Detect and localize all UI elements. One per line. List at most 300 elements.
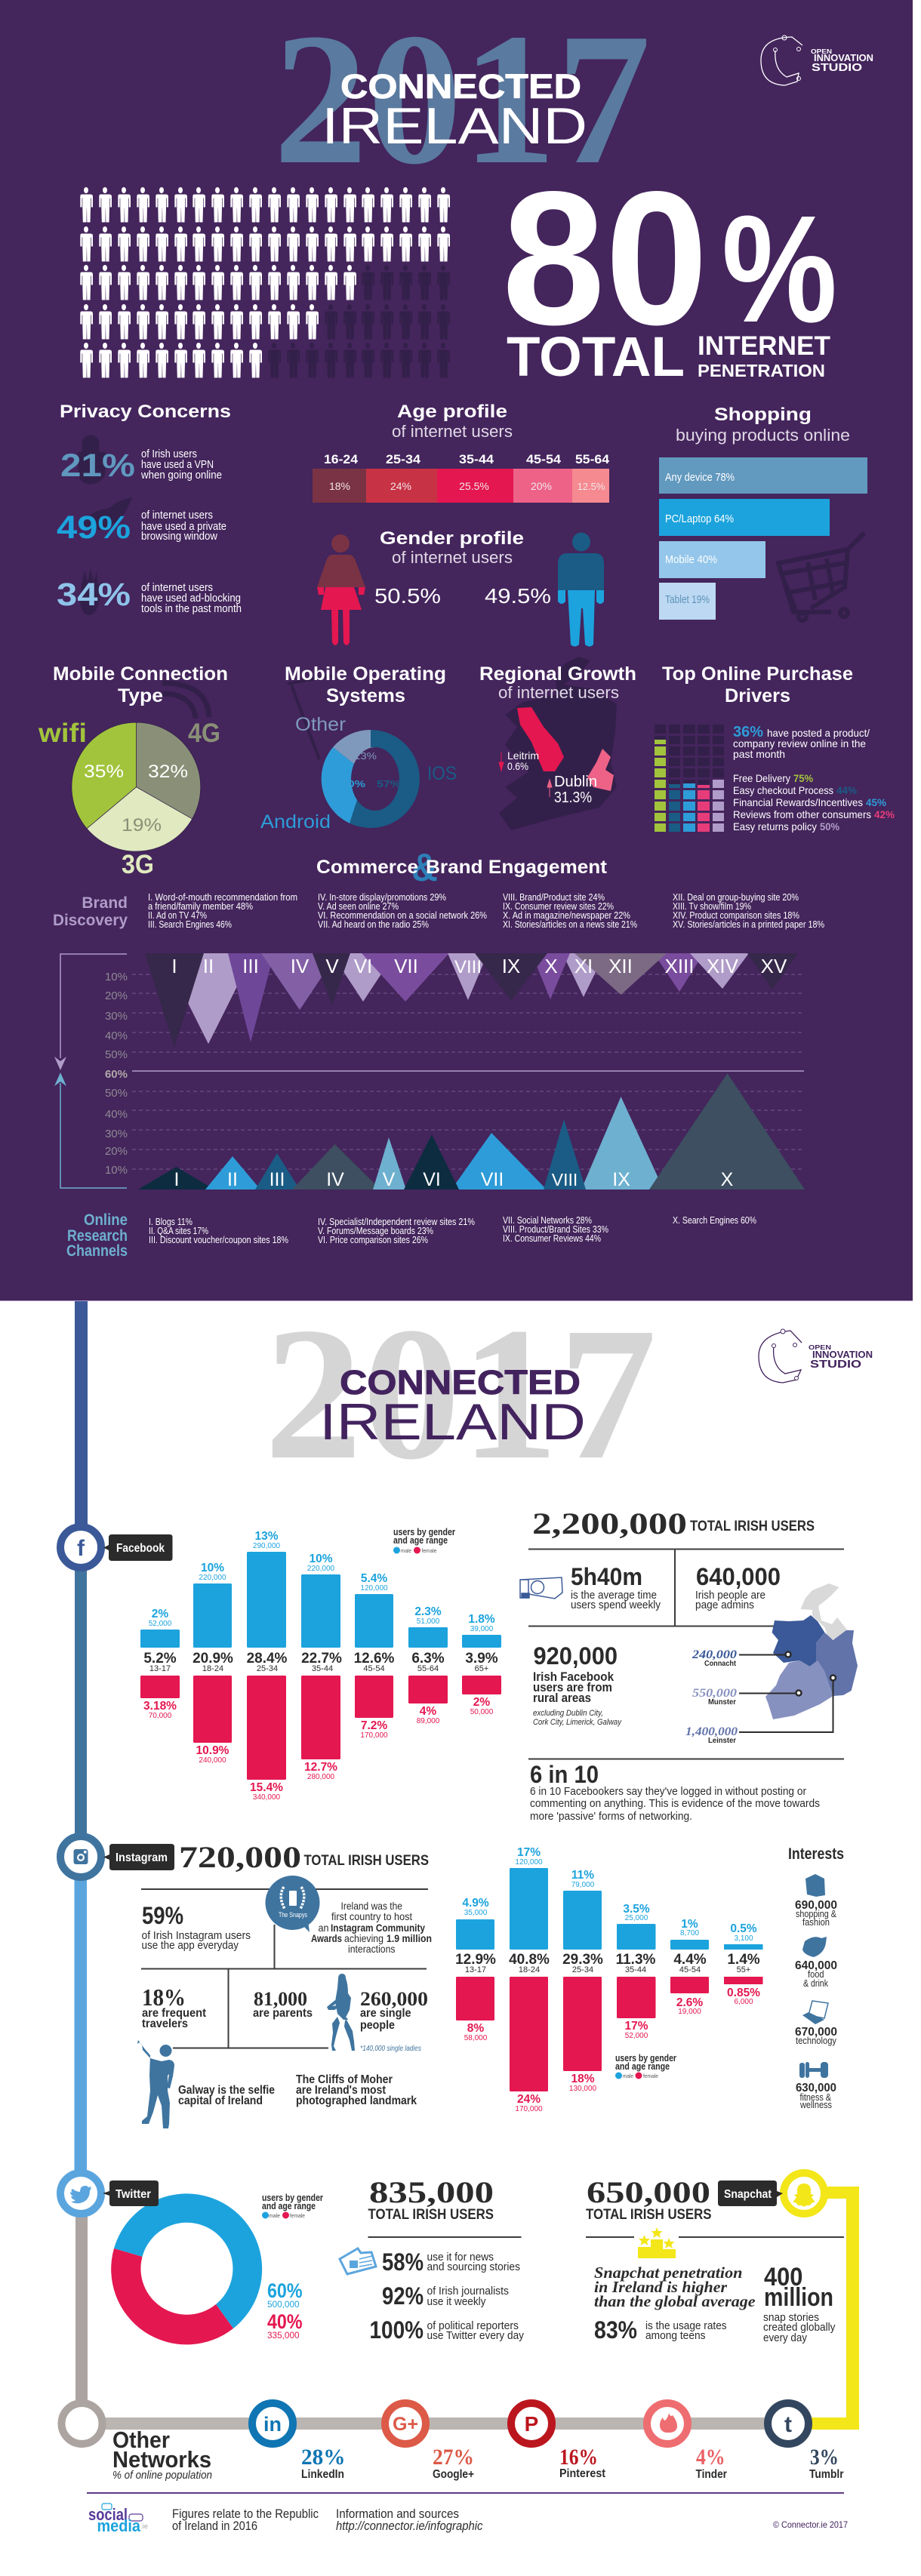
stat: 6 in 10 passive networking	[530, 1761, 820, 1823]
icon: shopping bag	[805, 1874, 825, 1897]
chart: brand discovery and research channels triangles: V	[325, 955, 339, 977]
panel: mobile connection type: wifi	[38, 719, 87, 748]
chart: brand discovery and research channels triangles: V	[383, 1169, 396, 1190]
panel: Facebook	[60, 1507, 858, 1823]
bar chart: Facebook users by gender and age: 220,000	[199, 1574, 226, 1582]
stats: Twitter news use	[370, 2248, 524, 2344]
chart: brand discovery and research channels triangles: IX	[612, 1169, 630, 1190]
bar chart: Instagram users by gender and age: 0.85%	[727, 1987, 760, 1999]
stat: page admins: page admins	[695, 1599, 754, 1611]
legend: Instagram gender: female	[643, 2073, 658, 2079]
icon: The Snapys award bubble	[266, 1876, 320, 1932]
chart: brand discovery and research channels triangles: 10%	[105, 1164, 128, 1177]
bar chart: Facebook users by gender and age: 6.3%	[411, 1651, 445, 1667]
text: Cliffs of Moher	[296, 2073, 417, 2107]
title: 2017 Connected Ireland: IRELAND	[322, 97, 587, 155]
bar chart: Instagram users by gender and age: 79,000	[571, 1881, 595, 1889]
panel: age profile: 35-44	[459, 452, 494, 466]
panel: regional growth	[479, 657, 636, 830]
panel: Instagram interests: 690,000	[795, 1899, 837, 1912]
stat: rural users: excluding Dublin City,	[533, 1709, 603, 1718]
bar chart: Instagram users by gender and age: 55+	[737, 1965, 750, 1974]
bar chart: Facebook users by gender and age: 22.7%	[301, 1651, 342, 1667]
legend: brand discovery list: XII. Deal on group-buying site 20%	[673, 891, 799, 903]
bar chart: Facebook users by gender and age: 25-34	[257, 1664, 278, 1673]
panel: age profile: 24%	[390, 480, 411, 492]
stat: single people: are single	[360, 2007, 411, 2020]
logo: Open Innovation Studio: OPEN	[811, 48, 832, 55]
stat: Twitter gender split: 40%	[267, 2310, 302, 2333]
callouts: province users: Connacht	[704, 1660, 737, 1668]
stat: single people: 260,000	[360, 1988, 428, 2010]
chart: brand discovery and research channels triangles: 10%	[105, 971, 128, 983]
label: Facebook	[103, 1534, 172, 1561]
panel: Instagram interests: Interests	[788, 1845, 844, 1863]
logo: Open Innovation Studio dark: STUDIO	[810, 1358, 861, 1371]
chart: brand discovery and research channels triangles: VII	[394, 955, 418, 977]
bar chart: Facebook users by gender and age: 2%	[152, 1608, 168, 1620]
heading: other networks: Networks	[112, 2446, 211, 2473]
bar chart: Facebook users by gender and age: 290,000	[253, 1542, 281, 1550]
legend: Twitter gender	[262, 2192, 323, 2219]
bar chart: Facebook users by gender and age: 51,000	[417, 1617, 440, 1626]
bar chart: Instagram users by gender and age: 45-54	[679, 1965, 701, 1974]
title: white section 2017 Connected Ireland: IRELAND	[319, 1393, 586, 1451]
timeline: network connector line	[74, 1301, 859, 2430]
label: Snapchat	[718, 2181, 783, 2206]
stat: daily use: use the app everyday	[142, 1939, 239, 1952]
stat: Tinder: Tinder	[696, 2468, 727, 2481]
label: Twitter	[103, 2181, 159, 2206]
panel: regional growth: Dublin	[554, 774, 597, 790]
headline stat: 80% total internet penetration	[502, 152, 837, 388]
bar chart: Instagram users by gender and age: 11.3%	[616, 1952, 656, 1968]
logo: Open Innovation Studio dark: OPEN	[809, 1343, 831, 1351]
panel: gender profile: 50.5%	[374, 584, 441, 608]
logo: socialmedia.ie: .ie	[140, 2522, 148, 2530]
stats: Twitter news use: and sourcing stories	[427, 2261, 520, 2273]
legend: Facebook gender	[393, 1526, 455, 1554]
bar chart: Instagram users by gender and age: 19,000	[678, 2008, 701, 2016]
text: copyright: © Connector.ie 2017	[773, 2519, 848, 2530]
panel: privacy concerns: have used a VPN	[141, 458, 214, 471]
chart: brand discovery and research channels triangles: XIV	[707, 955, 739, 977]
text: information and sources: http://connector.ie/infographic	[336, 2519, 483, 2533]
donut chart: operating systems: 30%	[341, 778, 366, 789]
chart: brand discovery and research channels triangles: IV	[326, 1169, 344, 1190]
stats: Twitter news use: of Irish journalists	[427, 2285, 509, 2297]
legend: brand discovery list: VII. Ad heard on the radio 25%	[318, 919, 429, 930]
icon: Instagram	[60, 1836, 101, 1877]
logo: Open Innovation Studio dark	[759, 1329, 873, 1383]
panel: privacy concerns: of internet users	[141, 581, 213, 594]
chart: brand discovery and research channels triangles: 50%	[105, 1048, 128, 1061]
legend: Instagram gender: male	[623, 2073, 633, 2079]
stat: LinkedIn: in	[263, 2413, 282, 2436]
title: white section 2017 Connected Ireland: CONNECTED	[340, 1363, 581, 1402]
legend: Twitter gender: female	[290, 2212, 305, 2219]
arrow: axis up	[60, 1083, 127, 1188]
panel: top online purchase drivers: 36%	[733, 724, 763, 740]
title: 2017 Connected Ireland: 2017	[273, 0, 651, 204]
stat: single people	[360, 1988, 428, 2053]
legend: brand discovery list: XV. Stories/articles in a printed paper 18%	[673, 919, 824, 930]
callouts: province users	[685, 1648, 836, 1745]
chart: brand discovery and research channels triangles: X	[721, 1169, 734, 1190]
panel: mobile operating systems: Android	[260, 811, 331, 833]
stat: frequent travelers	[142, 1984, 207, 2030]
bar chart: Facebook users by gender and age: 50,000	[470, 1708, 494, 1716]
chart: brand discovery and research channels triangles: I	[174, 1169, 179, 1190]
text: selfie capital	[178, 2084, 275, 2107]
stat: Instagram total users	[179, 1840, 429, 1874]
panel: privacy concerns: 34%	[57, 577, 131, 613]
stats: Twitter news use: use it for news	[427, 2251, 494, 2264]
stat: average time spent: 5h40m	[571, 1563, 642, 1590]
panel: Instagram interests: 630,000	[796, 2082, 836, 2094]
panel: purple internet overview	[0, 0, 913, 1301]
text: Instagram Community Awards: Awards	[311, 1932, 342, 1944]
panel: Instagram interests: 640,000	[795, 1959, 837, 1972]
bar chart: Facebook users by gender and age: 120,000	[360, 1584, 388, 1593]
panel: shopping: buying products online	[676, 426, 850, 445]
stat: teen usage: is the usage rates	[645, 2319, 727, 2332]
logo: socialmedia.ie	[88, 2504, 148, 2535]
text: Instagram Community Awards	[311, 1900, 432, 1955]
chart: brand discovery and research channels triangles: 50%	[105, 1087, 128, 1100]
stat: page admins: Irish people are	[695, 1589, 765, 1602]
chart: brand discovery and research channels triangles: 40%	[105, 1029, 128, 1042]
panel: Instagram interests: & drink	[803, 1978, 829, 1989]
text: Snapchat penetration: than the global average	[594, 2292, 755, 2310]
stat: LinkedIn: 28%	[301, 2445, 346, 2470]
legend: online research channels list: Online	[84, 1211, 128, 1229]
text: Cliffs of Moher: are Ireland's most	[296, 2084, 387, 2097]
stat: 6 in 10 passive networking: 6 in 10	[530, 1761, 599, 1788]
bar chart: Facebook users by gender and age: 1.8%	[468, 1613, 495, 1626]
panel: gender profile: Gender profile	[380, 528, 524, 549]
stat: teen usage: among teens	[645, 2329, 705, 2342]
panel: Instagram interests: wellness	[799, 2100, 832, 2110]
chart: brand discovery and research channels triangles	[54, 953, 805, 1190]
chart: brand discovery and research channels triangles: III	[242, 955, 259, 977]
stat: Tumblr: Tumblr	[809, 2468, 844, 2481]
stat: 400 million snap stories: million	[764, 2283, 833, 2312]
icon: wifi	[162, 683, 209, 719]
legend: brand discovery list: XIV. Product comparison sites 18%	[673, 909, 799, 921]
panel: top online purchase drivers: past month	[733, 748, 785, 760]
icon: The Snapys award bubble: The Snapys	[279, 1911, 307, 1919]
legend: brand discovery list: X. Ad in magazine/newspaper 22%	[503, 909, 630, 921]
stat: Tinder: 4%	[696, 2445, 725, 2470]
panel: Instagram interests: fashion	[802, 1917, 830, 1928]
bar chart: Facebook users by gender and age: 280,000	[307, 1773, 335, 1781]
panel: Snapchat	[586, 2173, 836, 2344]
panel: regional growth: Leitrim	[507, 749, 539, 762]
stat: Twitter gender split	[267, 2279, 302, 2341]
stat: 400 million snap stories: snap stories	[763, 2311, 819, 2324]
chart: brand discovery and research channels triangles: IV	[291, 955, 310, 977]
legend: brand discovery list	[53, 891, 824, 930]
icon: phone	[288, 676, 332, 759]
legend: online research channels list: I. Blogs 11%	[149, 1216, 193, 1227]
heading: other networks: % of online population	[112, 2469, 212, 2482]
bar chart: Instagram users by gender and age: 58,000	[464, 2034, 488, 2042]
stat: LinkedIn: LinkedIn	[301, 2468, 344, 2481]
stat: Snapchat total users	[586, 2175, 711, 2223]
panel: gender profile: of internet users	[392, 548, 513, 567]
stat: rural users: rural areas	[533, 1691, 591, 1705]
bar chart: Facebook users by gender and age: 89,000	[417, 1717, 440, 1725]
arrow: Leitrim down	[499, 752, 504, 771]
stat: 6 in 10 passive networking: more 'passive' forms of networking.	[530, 1811, 692, 1823]
stat: Tumblr: t	[784, 2412, 792, 2437]
panel: privacy concerns: of internet users	[141, 509, 213, 522]
legend: brand discovery list: XI. Stories/articles on a news site 21%	[503, 919, 637, 930]
panel: top online purchase drivers	[655, 663, 895, 833]
panel: privacy concerns: when going online	[140, 469, 222, 482]
stat: Tumblr: 3%	[810, 2445, 839, 2470]
panel: other networks	[62, 2403, 844, 2482]
panel: regional growth: 31.3%	[554, 789, 592, 806]
stat: Instagram total users: 720,000	[179, 1840, 301, 1874]
chart: brand discovery and research channels triangles: VIII	[552, 1170, 578, 1190]
icon: dumbbell	[799, 2062, 828, 2078]
panel: mobile operating systems: Other	[295, 714, 346, 735]
panel: top online purchase drivers: have posted a product/	[767, 727, 870, 739]
bar chart: Instagram users by gender and age: 4.9%	[462, 1897, 489, 1910]
stat: Twitter gender split: 335,000	[267, 2331, 300, 2341]
callouts: province users: 1,400,000	[685, 1725, 738, 1738]
panel: top online purchase drivers: Drivers	[725, 685, 790, 706]
bar chart: Instagram users by gender and age: 17%	[517, 1846, 541, 1859]
stats: Twitter news use: use it weekly	[427, 2295, 486, 2308]
stat: parents: 81,000	[254, 1988, 307, 2010]
stat: rural users: Irish Facebook	[533, 1670, 614, 1684]
panel: privacy concerns	[57, 402, 242, 615]
chart: brand discovery and research channels triangles: 20%	[105, 1145, 128, 1158]
legend: online research channels list: Research	[67, 1227, 128, 1245]
text: Snapchat penetration: Snapchat penetration	[594, 2264, 743, 2282]
pictogram: 80 percent of people online	[80, 187, 450, 377]
legend: brand discovery list: Discovery	[53, 912, 128, 929]
panel: age profile: 16-24	[324, 452, 359, 466]
legend: Instagram gender	[615, 2052, 676, 2079]
panel: privacy concerns: Privacy Concerns	[60, 402, 231, 422]
panel: top online purchase drivers: Easy returns policy	[733, 820, 817, 833]
bar chart: Facebook users by gender and age: 70,000	[149, 1712, 172, 1720]
bar chart: Facebook users by gender and age: 45-54	[363, 1664, 385, 1673]
bar chart: Facebook users by gender and age: 7.2%	[361, 1719, 387, 1732]
stat: rural users: Cork City, Limerick, Galway	[533, 1718, 622, 1727]
headline stat: 80% total internet penetration: TOTAL	[507, 325, 685, 388]
callouts: province users: Munster	[708, 1698, 736, 1707]
icon: newspaper	[340, 2248, 376, 2274]
icon: man taking selfie	[137, 2040, 174, 2128]
legend: brand discovery list: VI. Recommendation on a social network 26%	[318, 909, 487, 921]
panel: top online purchase drivers: Reviews from other consumers	[733, 808, 871, 820]
panel: mobile connection type: Type	[118, 685, 163, 706]
legend: brand discovery list: IX. Consumer review sites 22%	[503, 900, 614, 912]
panel: age profile: 55-64	[575, 452, 610, 466]
stat: Google+: Google+	[433, 2468, 474, 2481]
legend: online research channels list: VII. Social Networks 28%	[503, 1214, 592, 1226]
stat: frequent travelers: travelers	[142, 2017, 188, 2030]
chart: brand discovery and research channels triangles: VIII	[454, 957, 482, 977]
heading: commerce and brand engagement: Commerce	[316, 857, 418, 878]
panel: shopping: Tablet 19%	[665, 593, 710, 606]
panel: age profile: 20%	[531, 480, 552, 492]
icon: Facebook: f	[77, 1536, 85, 1561]
panel: shopping: Mobile 40%	[665, 553, 717, 566]
bar chart: Instagram users by gender and age: 35,000	[464, 1909, 488, 1917]
bar chart: Facebook users by gender and age	[140, 1530, 501, 1802]
panel: privacy concerns: 49%	[57, 509, 131, 546]
stat: Tinder	[647, 2403, 727, 2481]
panel: top online purchase drivers: 75%	[793, 772, 814, 784]
stat: parents	[253, 1988, 313, 2020]
footer	[87, 2492, 848, 2535]
bar chart: Instagram users by gender and age: 11%	[571, 1869, 594, 1882]
legend: brand discovery list: Brand	[82, 894, 128, 912]
legend: online research channels list: II. Q&A sites 17%	[149, 1225, 208, 1236]
icon: woman	[317, 534, 365, 645]
logo: socialmedia.ie: social	[88, 2505, 128, 2524]
callouts: province users: 550,000	[692, 1687, 737, 1700]
stat: daily use: 59%	[142, 1902, 183, 1929]
chart: brand discovery and research channels triangles: I	[171, 955, 177, 977]
legend: online research channels list: VIII. Product/Brand Sites 33%	[503, 1223, 608, 1235]
bar chart: Facebook users by gender and age: 13-17	[149, 1664, 171, 1673]
bar chart: Instagram users by gender and age: 24%	[517, 2093, 541, 2106]
text: Instagram Community Awards: 1.9 million	[387, 1932, 432, 1944]
panel: Instagram interests: food	[808, 1969, 824, 1980]
legend: online research channels list: V. Forums/Message boards 23%	[318, 1225, 433, 1236]
stat: page admins: 640,000	[696, 1563, 781, 1590]
text: Instagram Community Awards: interactions	[348, 1943, 396, 1955]
panel: top online purchase drivers: 45%	[866, 796, 887, 808]
stats: Twitter news use: of political reporters	[427, 2319, 519, 2332]
stat: Google+: G+	[393, 2414, 418, 2435]
arrow: Dublin up	[547, 780, 552, 797]
icon: laptop	[802, 2001, 828, 2024]
title: white section 2017 Connected Ireland: 2017	[264, 1288, 657, 1499]
stats: Twitter news use: 100%	[370, 2316, 424, 2344]
stat: Instagram total users: TOTAL IRISH USERS	[303, 1853, 429, 1869]
bar chart: Instagram users by gender and age: 25-34	[572, 1965, 593, 1974]
panel: privacy concerns: have used ad-blocking	[141, 592, 241, 605]
text: figures note: Figures relate to the Republic	[172, 2507, 319, 2521]
bar chart: Facebook users by gender and age: 39,000	[470, 1625, 494, 1633]
icon: Other networks ring	[62, 2403, 103, 2444]
icon: shopping cart	[778, 533, 864, 620]
logo: Open Innovation Studio: STUDIO	[812, 61, 862, 74]
stats: Twitter news use: 92%	[382, 2282, 424, 2310]
stat: Pinterest: 16%	[559, 2445, 598, 2470]
donut chart: operating systems: 13%	[354, 750, 377, 762]
panel: top online purchase drivers: Free Delivery	[733, 772, 790, 784]
text: information and sources: Information and sources	[336, 2507, 459, 2521]
stat: Twitter total users	[368, 2175, 494, 2223]
bar chart: Facebook users by gender and age: 15.4%	[250, 1781, 283, 1794]
stat: Twitter gender split: 500,000	[267, 2301, 300, 2310]
bar chart: Instagram users by gender and age: 18-24	[519, 1965, 540, 1974]
chart: brand discovery and research channels triangles: VI	[354, 955, 372, 977]
stat: average time spent: is the average time	[571, 1589, 657, 1602]
panel: Instagram	[60, 1836, 844, 2128]
panel: Instagram interests: fitness &	[800, 2092, 832, 2103]
icon: Twitter	[60, 2173, 101, 2214]
bar chart: Facebook users by gender and age: 10%	[201, 1562, 224, 1574]
logo: Open Innovation Studio dark: INNOVATION	[812, 1350, 873, 1360]
bar chart: Facebook users by gender and age: 220,000	[307, 1565, 335, 1573]
chart: brand discovery and research channels triangles: XII	[608, 955, 633, 977]
bar chart: Facebook users by gender and age: 10%	[309, 1553, 333, 1565]
chart: brand discovery and research channels triangles: XV	[761, 955, 787, 977]
stat: teen usage: 83%	[594, 2316, 637, 2344]
panel: Instagram interests	[788, 1845, 844, 2110]
panel: top online purchase drivers: Financial Rewards/Incentives	[733, 796, 863, 808]
panel: Instagram interests: shopping &	[796, 1909, 837, 1919]
stat: 400 million snap stories	[763, 2263, 836, 2344]
label: Instagram: Instagram	[116, 1851, 168, 1864]
text: figures note	[172, 2507, 319, 2533]
label: Facebook: Facebook	[116, 1542, 165, 1555]
stat: 6 in 10 passive networking: commenting on anything. This is evidence of the move towards	[530, 1798, 820, 1810]
bar chart: Instagram users by gender and age: 52,000	[625, 2032, 648, 2040]
stat: rural users: users are from	[533, 1680, 612, 1694]
stat: Snapchat total users: TOTAL IRISH USERS	[586, 2207, 711, 2223]
logo: Open Innovation Studio	[761, 35, 873, 85]
stats: Twitter news use: use Twitter every day	[427, 2329, 524, 2342]
panel: mobile connection type: Mobile Connection	[53, 663, 228, 685]
panel: mobile connection type: 3G	[122, 850, 154, 879]
chart: brand discovery and research channels triangles: X	[544, 955, 558, 977]
text: Cliffs of Moher: photographed landmark	[296, 2094, 417, 2107]
bar chart: Instagram users by gender and age: 0.5%	[730, 1922, 757, 1935]
panel: Twitter	[60, 2173, 844, 2344]
bar chart: Instagram users by gender and age: 130,000	[569, 2085, 597, 2093]
panel: Instagram interests: technology	[796, 2036, 837, 2046]
stat: Pinterest: P	[525, 2412, 538, 2436]
stat: average time spent	[571, 1563, 661, 1611]
pie chart: connection type: 35%	[84, 762, 124, 782]
chart: brand discovery and research channels triangles: II	[203, 955, 214, 977]
text: selfie capital: capital of Ireland	[178, 2094, 263, 2107]
bar chart: Facebook users by gender and age: 340,000	[253, 1793, 281, 1802]
text: Instagram Community Awards: first country to host	[331, 1910, 412, 1922]
panel: privacy concerns: browsing window	[141, 530, 217, 543]
legend: brand discovery list: I. Word-of-mouth recommendation from	[148, 891, 297, 903]
stat: 400 million snap stories: created globally	[763, 2321, 836, 2334]
stat: frequent travelers: 18%	[142, 1984, 186, 2011]
legend: online research channels list: IX. Consumer Reviews 44%	[503, 1233, 601, 1244]
logo: socialmedia.ie: media	[97, 2516, 141, 2535]
legend: brand discovery list: V. Ad seen online 27%	[318, 900, 399, 912]
callouts: province users: Leinster	[708, 1737, 736, 1745]
bar chart: Instagram users by gender and age: 1%	[681, 1918, 698, 1931]
stat: Twitter total users: 835,000	[369, 2175, 494, 2209]
bar chart: Instagram users by gender and age: 3.5%	[623, 1903, 650, 1916]
stat: LinkedIn	[252, 2403, 346, 2481]
panel: mobile operating systems: Mobile Operating	[285, 663, 446, 685]
stat: average time spent: users spend weekly	[571, 1599, 661, 1611]
bar chart: Instagram users by gender and age	[455, 1846, 762, 2113]
text: Snapchat penetration: in Ireland is higher	[594, 2278, 728, 2296]
label: Snapchat: Snapchat	[724, 2188, 772, 2201]
bar chart: Instagram users by gender and age: 29.3%	[562, 1952, 603, 1968]
panel: age profile: 25-34	[386, 452, 421, 466]
